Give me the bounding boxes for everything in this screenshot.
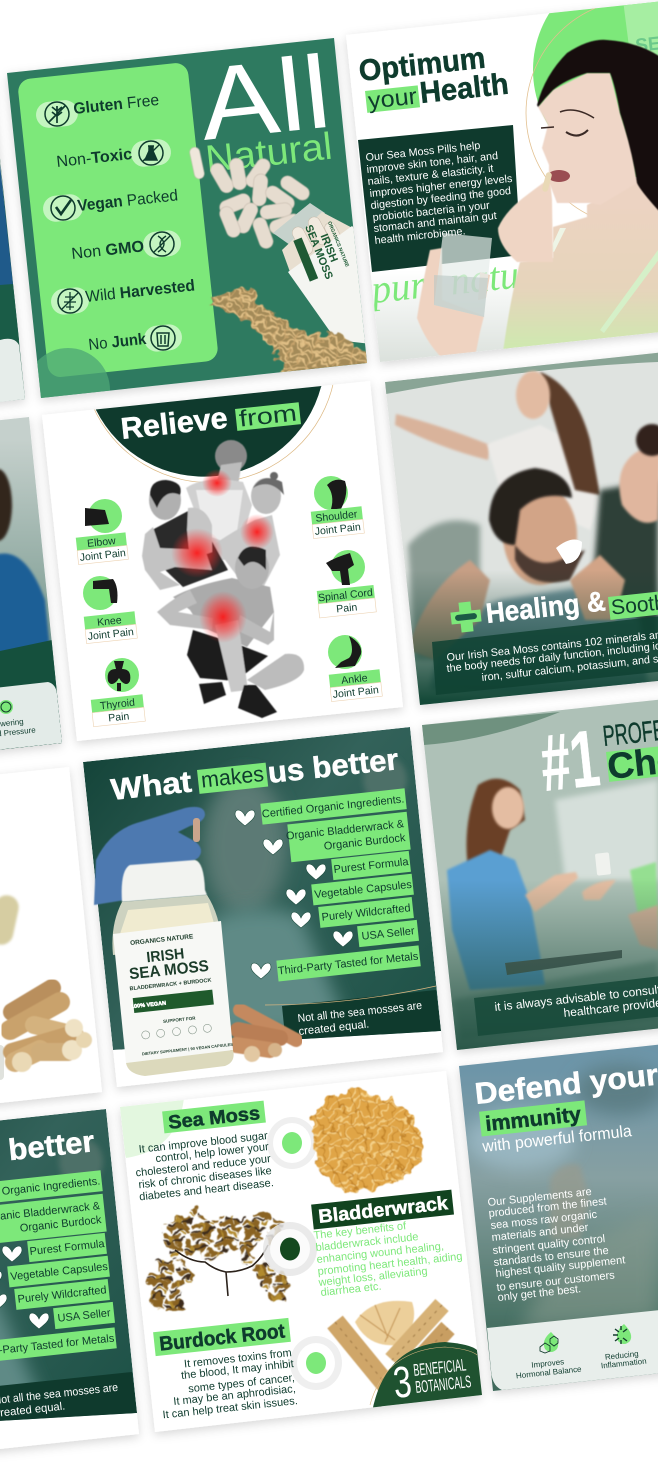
burdock root pile	[236, 1010, 296, 1062]
marker: sea moss	[267, 1117, 317, 1169]
description text: produced from the finest	[488, 1195, 607, 1220]
product bottle	[112, 860, 234, 1076]
description panel: health microbiome.	[374, 225, 466, 247]
heading: relieve: Relieve	[119, 402, 229, 446]
tag: purely wildcrafted: Purely Wildcrafted	[17, 1284, 107, 1306]
panel: three beneficial botanicals	[110, 1071, 490, 1432]
badge: three beneficial botanicals: 3	[391, 1357, 414, 1408]
description panel: stomach and maintain gut	[373, 210, 497, 235]
tag: certified organic: Certified Organic Ingredients.	[261, 793, 405, 821]
not all panel: Not all the sea mosses are	[297, 1000, 423, 1025]
tag: usa seller: USA Seller	[57, 1307, 112, 1325]
tag: purest formula	[331, 851, 411, 880]
feature: no junk	[89, 324, 182, 352]
label: bladderwrack: Bladderwrack	[317, 1193, 449, 1228]
subheading: powerful formula: with powerful formula	[481, 1122, 633, 1156]
marker: bladderwrack	[263, 1222, 317, 1276]
feature: vegan packed: Vegan Packed	[77, 187, 179, 215]
product bottle: DIETARY SUPPLEMENT | 90 VEGAN CAPSULES	[142, 1042, 234, 1056]
label: knee joint pain: Knee	[97, 614, 122, 629]
feature: non-toxic	[57, 139, 171, 167]
feature: non-toxic: Non-Toxic	[56, 146, 133, 171]
text: bladderwrack benefits: bladderwrack include	[315, 1231, 419, 1254]
icon: elbow	[85, 499, 122, 533]
tag: vegetable capsules: Vegetable Capsules	[314, 879, 413, 901]
supplement bottle: ORGANICS NATURE	[326, 221, 350, 269]
text: sea moss benefits: cholesterol and reduce your	[135, 1153, 272, 1179]
panel: optimum your health	[346, 0, 658, 362]
tag: purest formula: Purest Formula	[333, 856, 410, 876]
text: bladderwrack benefits	[313, 1220, 463, 1299]
description panel	[358, 125, 521, 272]
description text: Our Supplements are	[487, 1186, 592, 1209]
description text: sea moss raw organic	[490, 1209, 598, 1232]
green features panel	[17, 62, 219, 378]
label: burdock root: Burdock Root	[158, 1320, 286, 1356]
heading: optimum: Optimum	[357, 42, 487, 88]
description text: only get the best.	[497, 1283, 582, 1304]
icon: inflammation	[613, 1324, 631, 1344]
image: burdock root	[335, 1301, 448, 1388]
description panel: digestion by feeding the good	[370, 185, 512, 212]
blurred doctor background	[83, 727, 441, 1050]
heading: your highlight: your	[367, 83, 419, 114]
tag: bladderwrack and burdock	[0, 1194, 107, 1245]
text: burdock benefits: some types of cancer,	[188, 1372, 295, 1395]
caption: reducing inflammation: Inflammation	[600, 1357, 647, 1370]
caption: hormonal balance: Improves	[531, 1357, 565, 1370]
tag: usa seller: USA Seller	[361, 925, 416, 943]
tag: purest formula	[27, 1233, 107, 1262]
panel: relieve from	[42, 370, 403, 741]
icons: capsule hearts	[235, 810, 353, 979]
image: sea moss	[312, 1086, 423, 1192]
text: bladderwrack benefits: weight loss, alleviating	[317, 1265, 428, 1289]
panel: what makes us better	[83, 727, 443, 1087]
feature: vegan packed	[42, 187, 179, 223]
text: burdock benefits: It may be an aphrodisiac,	[173, 1383, 296, 1408]
label: ankle joint pain	[329, 669, 382, 702]
hand with glass	[417, 248, 484, 356]
tag: purely wildcrafted: Purely Wildcrafted	[321, 902, 411, 924]
icon: thyroid	[105, 658, 139, 692]
caption: hormonal balance	[516, 1357, 582, 1380]
tag: third party tested: Third-Party Tasted for Metals	[277, 950, 419, 977]
description panel: Our Sea Moss Pills help	[365, 140, 481, 164]
text: bladderwrack benefits: The key benefits of	[313, 1220, 408, 1242]
description text: standards to ensure the	[493, 1245, 609, 1269]
text: burdock benefits: the blood, It may inhibit	[181, 1358, 294, 1382]
not all panel: created equal.	[298, 1019, 370, 1038]
text: sea moss benefits: control, help lower your	[155, 1141, 270, 1165]
decorative blob	[37, 348, 110, 398]
label: spinal cord pain: Spinal Cord	[317, 587, 373, 604]
panel: cropped card row 2 left, blood pressure	[0, 417, 65, 756]
tag: purely wildcrafted	[14, 1279, 110, 1310]
text: burdock benefits: It removes toxins from	[183, 1347, 292, 1370]
label: knee joint pain: Joint Pain	[87, 626, 135, 643]
description text	[446, 626, 658, 684]
heading: makes highlight: makes	[200, 761, 265, 793]
label: shoulder joint pain: Shoulder	[315, 508, 358, 525]
green circle behind woman	[533, 0, 658, 177]
heading: health: Health	[418, 68, 510, 110]
bottle glass	[0, 1045, 4, 1080]
product bottle: BLADDERWRACK + BURDOCK	[129, 978, 212, 992]
heading: immunity highlight: immunity	[484, 1103, 582, 1136]
description text: highest quality supplement	[495, 1254, 626, 1280]
description text: to ensure our customers	[496, 1269, 616, 1294]
text: bladderwrack benefits: diarrhea etc.	[320, 1281, 382, 1299]
panel: cropped card row 3 left, burdock	[0, 767, 102, 1127]
marker: burdock root	[290, 1336, 342, 1390]
text: sea moss benefits	[135, 1130, 274, 1203]
description panel: improve skin tone, hair, and	[366, 150, 499, 176]
feature: wild harvested	[50, 277, 196, 316]
description panel: probiotic bacteria in your	[372, 200, 491, 224]
tag: purely wildcrafted	[318, 897, 414, 928]
caption: lowering blood pressure	[0, 719, 36, 736]
label: shoulder joint pain	[311, 506, 364, 539]
dark caption panel	[474, 975, 658, 1036]
dark text panel	[432, 615, 658, 695]
product bottle: 100% VEGAN	[131, 1001, 166, 1010]
panel: healing and soothing	[380, 347, 658, 710]
not all panel	[265, 986, 441, 1046]
label: elbow joint pain: Joint Pain	[79, 547, 127, 564]
icon: knee	[83, 576, 118, 610]
dark dome	[96, 386, 322, 477]
badge: three beneficial botanicals: BENEFICIAL	[412, 1355, 467, 1380]
text: burdock benefits	[162, 1347, 298, 1421]
tag: usa seller	[357, 920, 419, 947]
panel: number one professional choice	[420, 690, 658, 1060]
people in pain photo	[142, 440, 304, 718]
hand at mouth	[498, 178, 553, 262]
label: shoulder joint pain: Joint Pain	[314, 521, 362, 538]
capsules	[189, 146, 312, 250]
fitness photo	[465, 1065, 658, 1330]
icon: plus capsule	[449, 600, 483, 634]
feature: non gmo	[72, 230, 181, 259]
tag: bladderwrack and burdock: Organic Bladderwrack &	[285, 818, 405, 843]
sea moss strands	[209, 286, 367, 372]
woman photo	[417, 40, 658, 356]
family photo	[385, 352, 658, 700]
feature: non gmo: Non GMO	[71, 238, 145, 263]
gloved hand with capsule	[94, 807, 205, 905]
burdock roots	[10, 988, 92, 1072]
label: knee joint pain	[84, 611, 137, 644]
label: thyroid pain: Pain	[108, 710, 130, 725]
not all panel	[0, 1372, 137, 1428]
heading: from highlight: from	[238, 400, 298, 432]
caption: reducing inflammation: Reducing	[604, 1349, 639, 1362]
caption: hormonal balance: Hormonal Balance	[516, 1364, 582, 1380]
text: bladderwrack benefits: promoting heart health, aiding	[317, 1251, 463, 1278]
icon: shoulder	[314, 476, 348, 510]
panel: cropped card row 1 left	[0, 72, 25, 434]
badge: three beneficial botanicals: BOTANICALS	[414, 1372, 472, 1397]
product bottle: ORGANICS NATURE	[130, 933, 194, 947]
label: spinal cord pain	[317, 585, 376, 618]
icon: spinal cord	[326, 550, 365, 585]
product bottle: IRISH	[146, 945, 185, 966]
tag: bladderwrack and burdock: Organic Burdock	[19, 1214, 103, 1235]
label: sea moss: Sea Moss	[167, 1103, 261, 1134]
heading: Natural: Natural	[203, 126, 334, 181]
text: sea moss benefits: It can improve blood sugar	[138, 1130, 269, 1156]
panel: all natural	[7, 34, 380, 432]
text: burdock benefits: It can help treat skin issues.	[162, 1395, 298, 1421]
heading: number one: #1	[536, 713, 603, 808]
panel: defend your immunity	[459, 1031, 658, 1395]
tag: vegetable capsules: Vegetable Capsules	[10, 1261, 109, 1283]
product bottle: SEA MOSS	[128, 958, 210, 983]
label: spinal cord pain: Pain	[336, 601, 358, 616]
script: pure nature: pure natu	[366, 251, 521, 312]
capsule image	[0, 893, 21, 947]
icons: capsule hearts	[0, 1246, 49, 1329]
tag: vegetable capsules	[7, 1256, 110, 1287]
supplement bottle: IRISH	[318, 232, 340, 264]
label: thyroid pain: Thyroid	[99, 697, 136, 712]
label: ankle joint pain: Joint Pain	[332, 684, 380, 701]
description panel: nails, texture & elasticity. it	[367, 163, 494, 188]
supplement bottle: SEA MOSS	[302, 223, 335, 281]
icon: ankle	[328, 635, 362, 669]
label: ankle joint pain: Ankle	[341, 672, 368, 687]
heading: us better: us better	[266, 743, 400, 790]
feature: gluten free: Gluten Free	[73, 92, 160, 118]
text: bladderwrack benefits: enhancing wound healing,	[316, 1240, 444, 1266]
caption: reducing inflammation	[600, 1349, 647, 1370]
tag: vegetable capsules	[311, 874, 414, 905]
label: thyroid pain	[91, 694, 145, 727]
supplement bottle	[273, 203, 365, 344]
pale green corner	[110, 1098, 184, 1158]
icon: pressure gauge	[0, 700, 13, 714]
tag: bladderwrack and burdock: Organic Burdock	[323, 832, 407, 853]
description text: materials and under	[491, 1222, 589, 1244]
heading: All: All	[194, 34, 336, 162]
description panel: improves higher energy levels	[369, 173, 514, 200]
tag: usa seller	[53, 1302, 115, 1329]
description text	[487, 1186, 626, 1304]
white benefits panel	[487, 1309, 658, 1395]
heading: defend your: Defend your	[473, 1059, 658, 1111]
feature: wild harvested: Wild Harvested	[85, 277, 196, 306]
heading: what: What	[109, 766, 193, 807]
panel: what makes us better duplicate	[0, 1109, 139, 1469]
description text: stringent quality control	[492, 1233, 606, 1257]
feature: gluten free	[36, 96, 158, 128]
image: bladderwrack	[150, 1208, 290, 1312]
tag: bladderwrack and burdock	[285, 812, 411, 863]
icon: hormonal balance	[540, 1332, 558, 1353]
label: elbow joint pain: Elbow	[87, 535, 117, 550]
text: sea moss benefits: risk of chronic diseases like	[138, 1165, 272, 1191]
text: sea moss benefits: diabetes and heart disease.	[139, 1177, 274, 1203]
badge: three beneficial botanicals	[370, 1342, 490, 1415]
tag: purest formula: Purest Formula	[29, 1238, 106, 1258]
heading: healing and: Healing &	[484, 585, 607, 629]
label: elbow joint pain	[76, 532, 128, 565]
nurse photo	[422, 712, 658, 1040]
product bottle: SUPPORT FOR	[163, 1015, 196, 1024]
feature: no junk: No Junk	[88, 331, 147, 354]
